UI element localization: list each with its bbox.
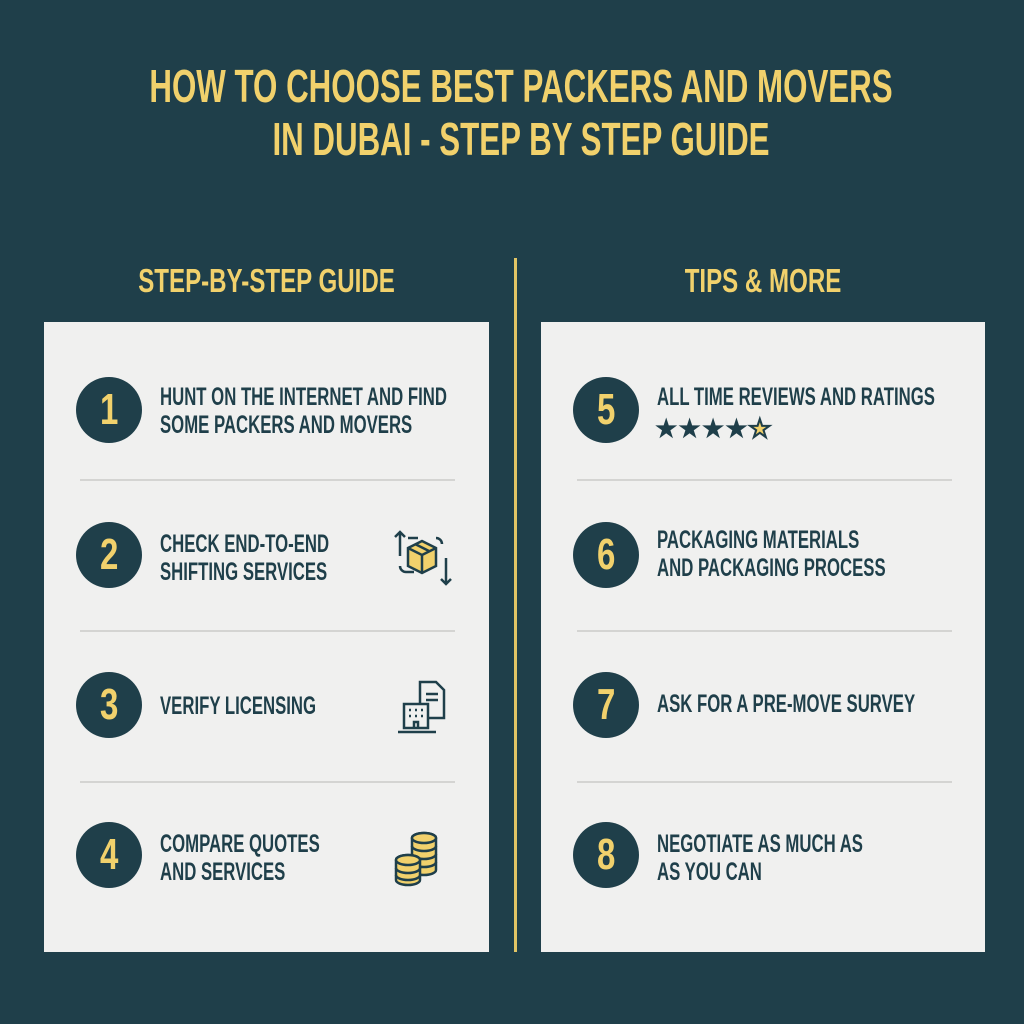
step 1: SOME PACKERS AND MOVERS	[160, 411, 412, 439]
icon: building and document	[398, 680, 446, 734]
step 6: AND PACKAGING PROCESS	[657, 554, 886, 582]
step 2: SHIFTING SERVICES	[160, 558, 327, 586]
step 8	[573, 822, 863, 888]
step 3: 3	[100, 680, 118, 729]
heading: step-by-step guide: STEP-BY-STEP GUIDE	[138, 262, 395, 299]
step 4: COMPARE QUOTES	[160, 830, 320, 858]
title: IN DUBAI - STEP BY STEP GUIDE	[272, 113, 770, 165]
step 4	[76, 822, 438, 888]
step 5	[573, 377, 935, 443]
step 3: VERIFY LICENSING	[160, 692, 316, 720]
panel: left steps	[44, 322, 489, 952]
step 6: PACKAGING MATERIALS	[657, 526, 859, 554]
step 8: NEGOTIATE AS MUCH AS	[657, 830, 863, 858]
step 4: 4	[100, 830, 118, 879]
step 7: ASK FOR A PRE-MOVE SURVEY	[657, 690, 915, 718]
step 8: AS YOU CAN	[657, 858, 762, 886]
step 6	[573, 522, 886, 588]
step 5: ALL TIME REVIEWS AND RATINGS	[657, 383, 935, 411]
step 8: 8	[597, 830, 615, 879]
step 6: 6	[597, 530, 615, 579]
step 1: 1	[100, 385, 118, 434]
step 7	[573, 672, 915, 738]
icon: coins	[394, 832, 438, 886]
step 7: 7	[597, 680, 615, 729]
step 4: AND SERVICES	[160, 858, 285, 886]
step 5: 5	[597, 385, 615, 434]
title	[149, 60, 893, 165]
title: HOW TO CHOOSE BEST PACKERS AND MOVERS	[149, 60, 893, 112]
step 2	[76, 522, 452, 588]
step 2: 2	[100, 530, 118, 579]
divider	[514, 258, 517, 952]
icon: star rating: ★★★★★	[655, 415, 772, 443]
step 1	[76, 377, 447, 443]
heading: tips & more: TIPS & MORE	[685, 262, 841, 299]
step 3	[76, 672, 446, 738]
step 2: CHECK END-TO-END	[160, 530, 329, 558]
panel: right tips	[541, 322, 985, 952]
step 1: HUNT ON THE INTERNET AND FIND	[160, 383, 447, 411]
icon: box	[394, 530, 452, 586]
